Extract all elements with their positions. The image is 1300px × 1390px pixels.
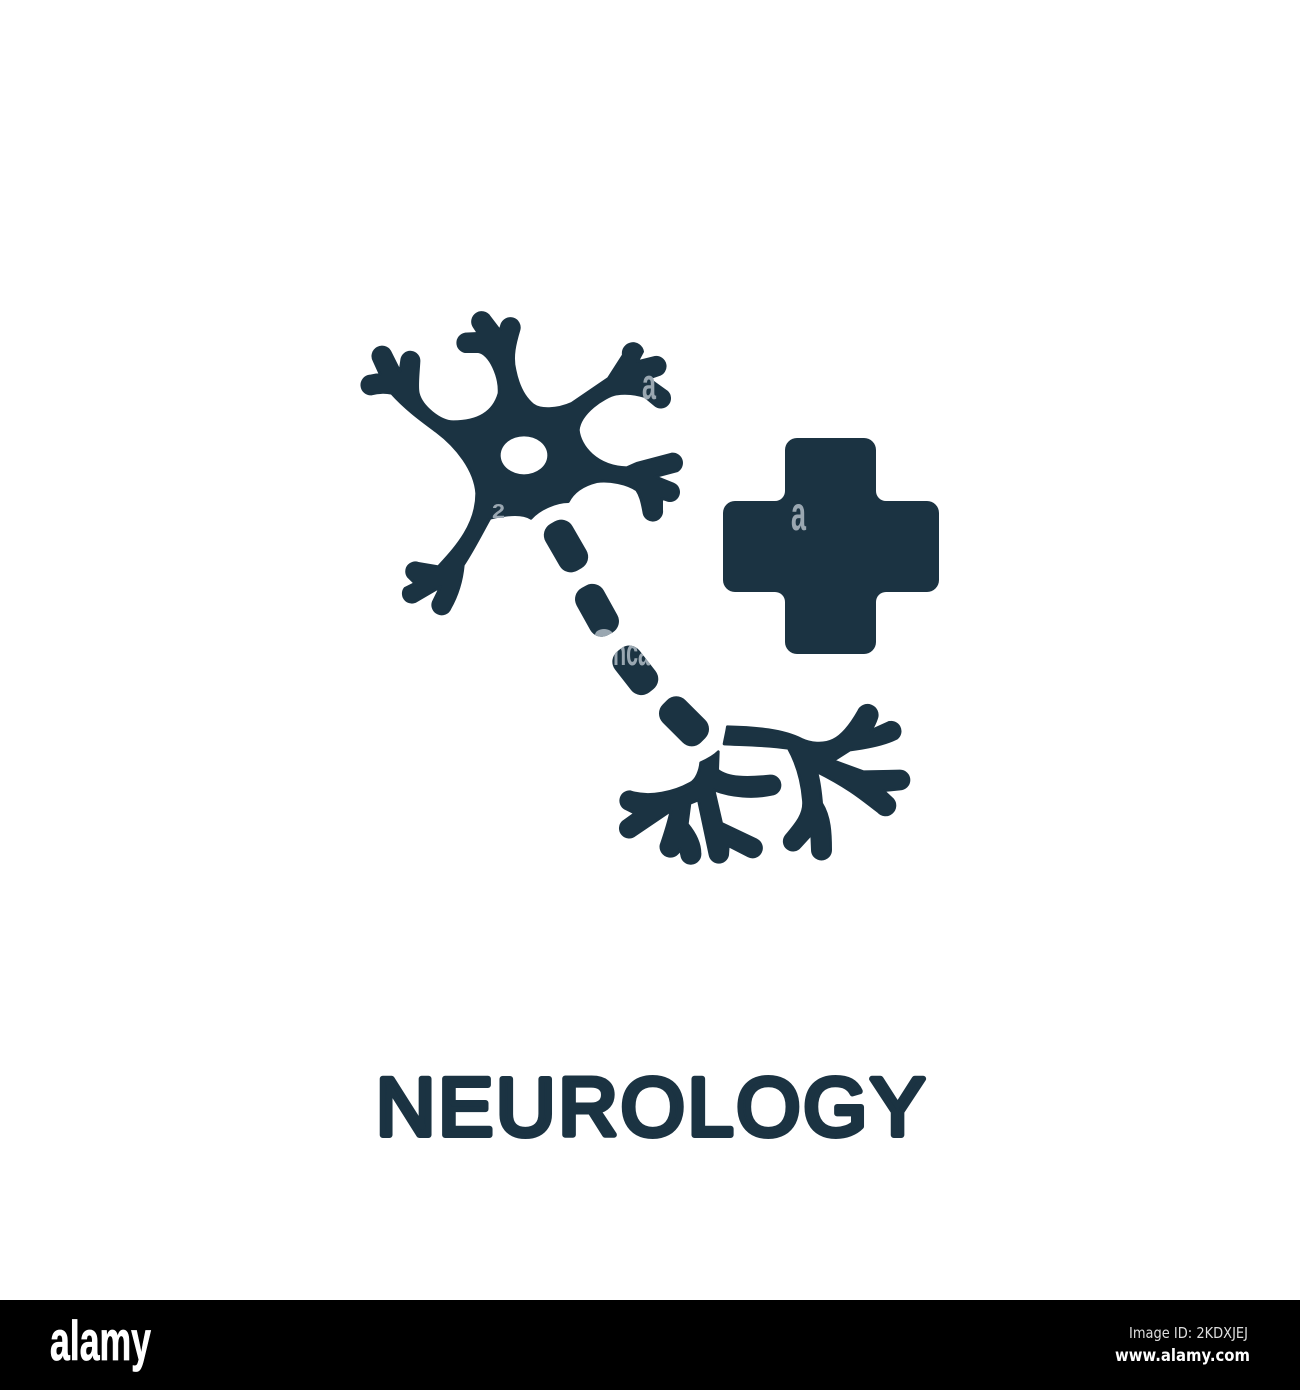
icon: neuron cell body with dendrites	[362, 313, 682, 614]
watermark fragments: a	[642, 360, 656, 409]
icon: neurology (neuron with medical cross)	[362, 313, 939, 863]
footer logo: alamy	[50, 1309, 151, 1372]
footer image id: Image ID: 2KDXJEJ	[1129, 1324, 1248, 1342]
watermark fragments: nca	[613, 632, 650, 674]
footer bar	[0, 1300, 1300, 1390]
watermark fragments: 2	[492, 501, 505, 523]
watermark fragments: a	[791, 488, 806, 541]
icon: axon myelin segments	[539, 515, 714, 752]
footer url: www.alamy.com	[1115, 1346, 1250, 1366]
icon: medical cross	[723, 438, 939, 654]
icon: cell nucleus	[501, 436, 547, 474]
watermark fragments	[492, 360, 806, 674]
icon: axon terminal branches	[620, 705, 909, 863]
title: NEUROLOGY	[376, 1062, 925, 1153]
